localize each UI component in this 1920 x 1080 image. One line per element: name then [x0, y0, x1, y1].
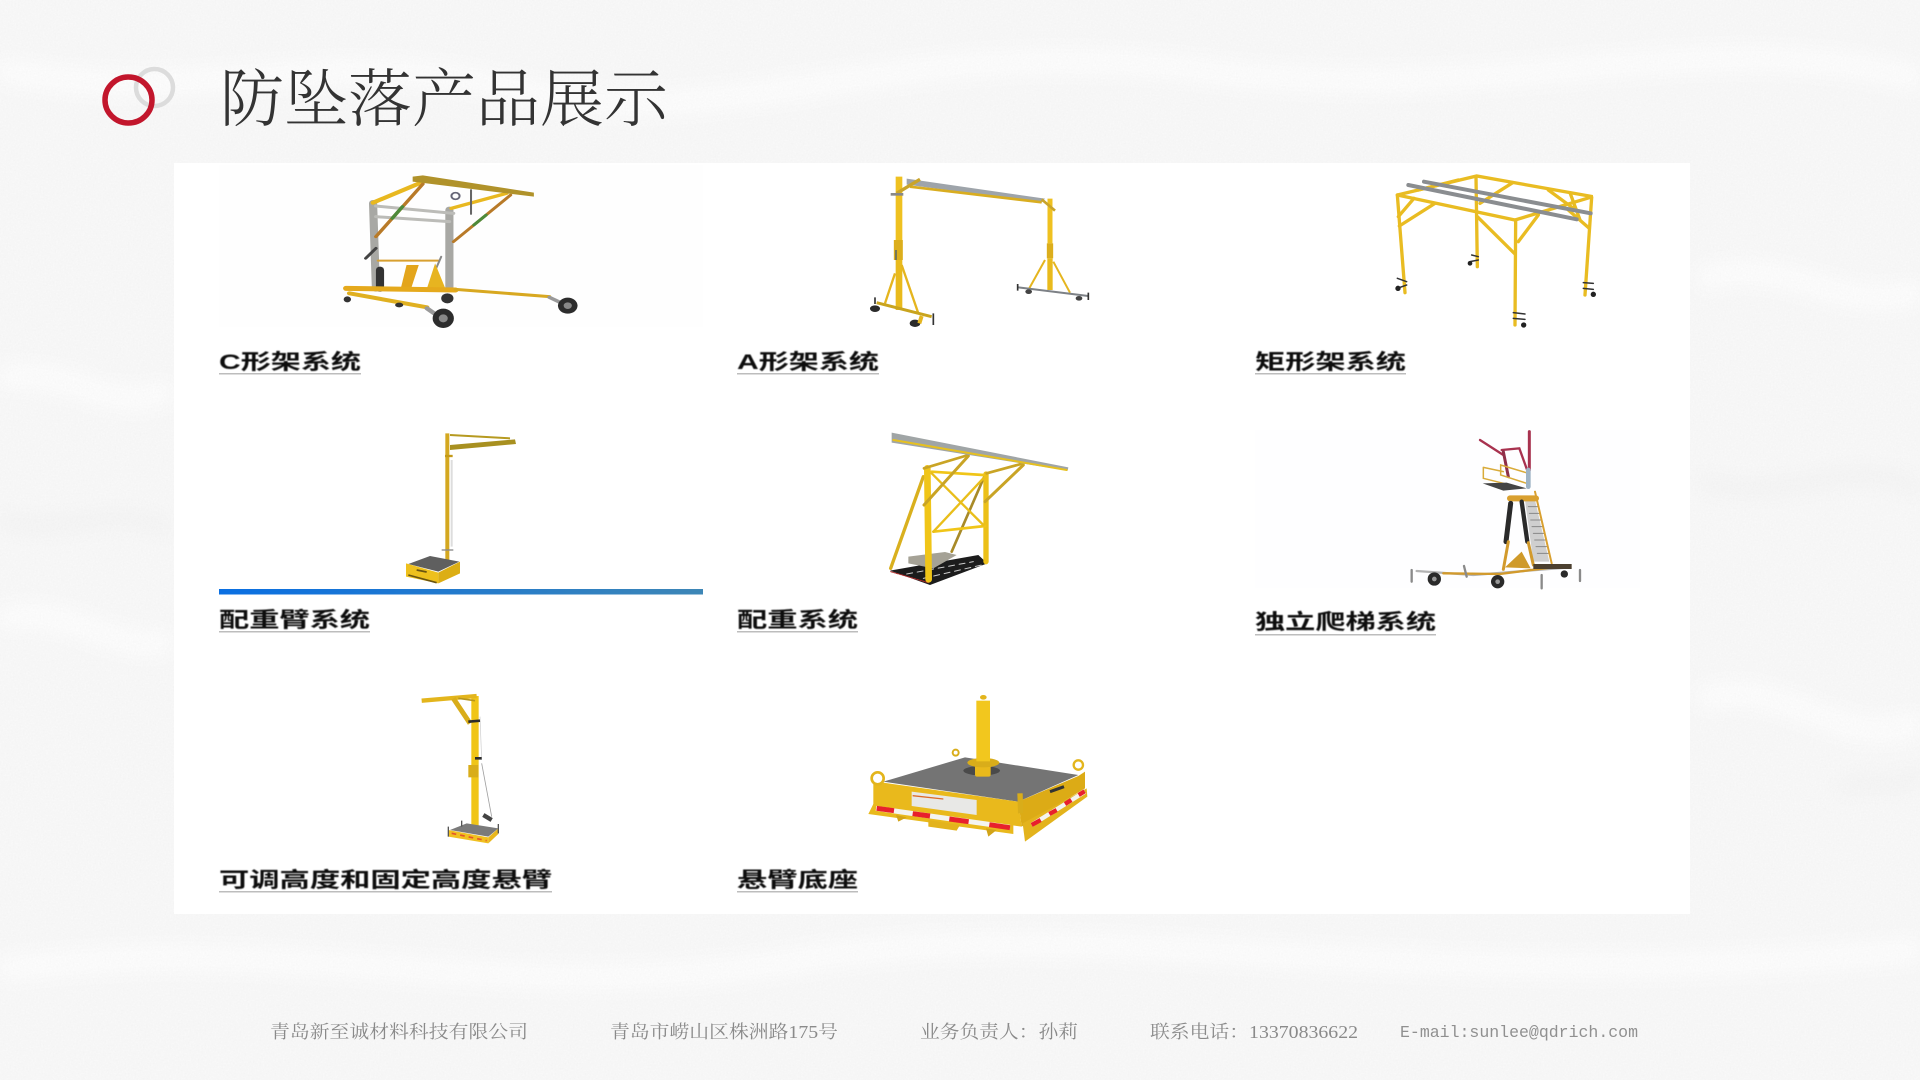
product: C-frame system — [344, 175, 578, 328]
product: freestanding ladder system — [1412, 432, 1580, 588]
label: counterweight: 配重系统 — [737, 608, 858, 632]
email: E-mail:sunlee@qdrich.com — [1400, 1023, 1638, 1042]
title: 防坠落产品展示 — [220, 65, 668, 135]
product: adjustable and fixed height davit — [422, 696, 498, 843]
label: davit base — [737, 868, 858, 892]
contact person: 业务负责人：孙莉 — [920, 1022, 1078, 1042]
telephone: 联系电话：13370836622 — [1150, 1022, 1358, 1042]
panel: product grid — [174, 163, 1690, 914]
label: davit base: 悬臂底座 — [737, 868, 858, 892]
product: davit base — [868, 695, 1087, 842]
product: rectangular frame system — [1395, 176, 1596, 328]
label: A-frame: A形架系统 — [737, 350, 879, 374]
label: counterweight — [737, 608, 858, 632]
blue divider bar — [219, 589, 703, 594]
label: C-frame: C形架系统 — [219, 350, 361, 374]
label: adjustable and fixed height davit: 可调高度和固定高度悬臂 — [219, 868, 552, 892]
product: counterweight system — [890, 433, 1068, 585]
company name: 青岛新至诚材料科技有限公司 — [270, 1022, 528, 1042]
product: A-frame system — [870, 177, 1088, 327]
product: counterweight boom system — [406, 433, 516, 583]
address: 青岛市崂山区株洲路175号 — [610, 1022, 838, 1042]
label: counterweight boom: 配重臂系统 — [219, 608, 370, 632]
icon: overlapping rings — [105, 69, 173, 123]
footer contact line — [270, 1022, 1638, 1042]
label: rectangular frame: 矩形架系统 — [1255, 350, 1406, 374]
label: freestanding ladder: 独立爬梯系统 — [1255, 610, 1436, 634]
